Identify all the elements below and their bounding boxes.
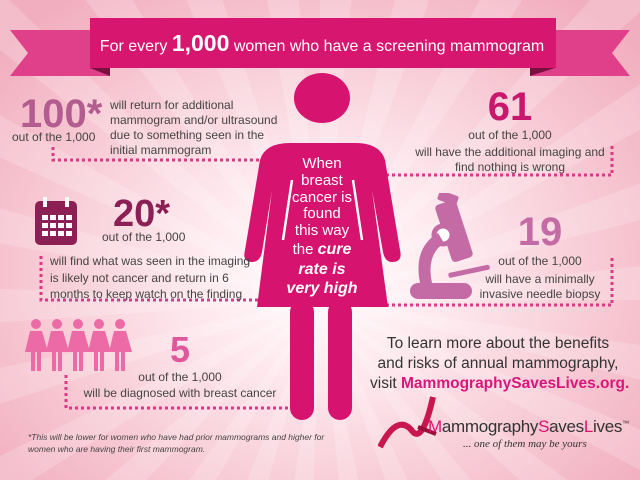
footnote: women who are having their first mammogram. — [28, 444, 205, 454]
footnote: *This will be lower for women who have had prior mammograms and higher for — [28, 432, 324, 442]
stat 100: will return for additional — [110, 98, 233, 112]
call to action: visit MammographySavesLives.org. — [370, 375, 629, 392]
icon: calendar — [35, 197, 77, 245]
icon: five women — [25, 319, 132, 371]
stat 5: out of the 1,000 — [138, 370, 222, 384]
stat 5: 5 — [170, 329, 190, 370]
stat 61: out of the 1,000 — [468, 128, 552, 142]
text: months to keep watch on the finding — [50, 287, 242, 301]
stat 100: 100* — [20, 92, 102, 136]
center text: breast — [301, 172, 343, 189]
center text: this way — [295, 222, 349, 239]
center text: When — [302, 155, 342, 172]
stat 20: will find what was seen in the imaging — [50, 254, 250, 268]
stat 19: out of the 1,000 — [498, 254, 582, 268]
stat 5 — [84, 329, 276, 400]
logo: MammographySavesLives™ — [428, 417, 629, 436]
stat 100: initial mammogram — [110, 143, 211, 157]
logo: ... one of them may be yours — [463, 438, 587, 450]
stat 20: out of the 1,000 — [102, 230, 185, 244]
banner — [10, 18, 630, 76]
stat 61 — [415, 85, 605, 174]
icon: microscope — [410, 193, 490, 299]
stat 61: find nothing is wrong — [455, 160, 565, 174]
center text: rate is — [298, 261, 346, 278]
stat 100: due to something seen in the — [110, 128, 264, 142]
call to action: and risks of annual mammography, — [378, 355, 618, 372]
center text: very high — [286, 280, 358, 297]
banner: For every 1,000 women who have a screening mammogram — [100, 30, 544, 56]
call to action: To learn more about the benefits — [387, 335, 609, 352]
stat 5: will be diagnosed with breast cancer — [84, 386, 276, 400]
center text: the cure — [293, 241, 351, 258]
center text — [286, 155, 358, 297]
stat 19: will have a minimally — [485, 272, 595, 286]
stat 19: invasive needle biopsy — [480, 287, 600, 301]
stat 20 — [50, 193, 250, 301]
stat 61: 61 — [488, 85, 532, 129]
center text: cancer is — [292, 189, 352, 206]
stat 100 — [12, 92, 277, 157]
footnote — [28, 432, 324, 454]
center text: found — [303, 205, 341, 222]
stat 20: is likely not cancer and return in 6 — [50, 270, 229, 284]
stat 20: 20* — [113, 193, 170, 235]
stat 100: mammogram and/or ultrasound — [110, 113, 277, 127]
logo — [378, 396, 629, 450]
stat 100: out of the 1,000 — [12, 130, 95, 144]
call to action — [370, 335, 629, 392]
stat 19 — [480, 210, 600, 301]
stat 19: 19 — [518, 210, 562, 254]
stat 61: will have the additional imaging and — [415, 145, 605, 159]
